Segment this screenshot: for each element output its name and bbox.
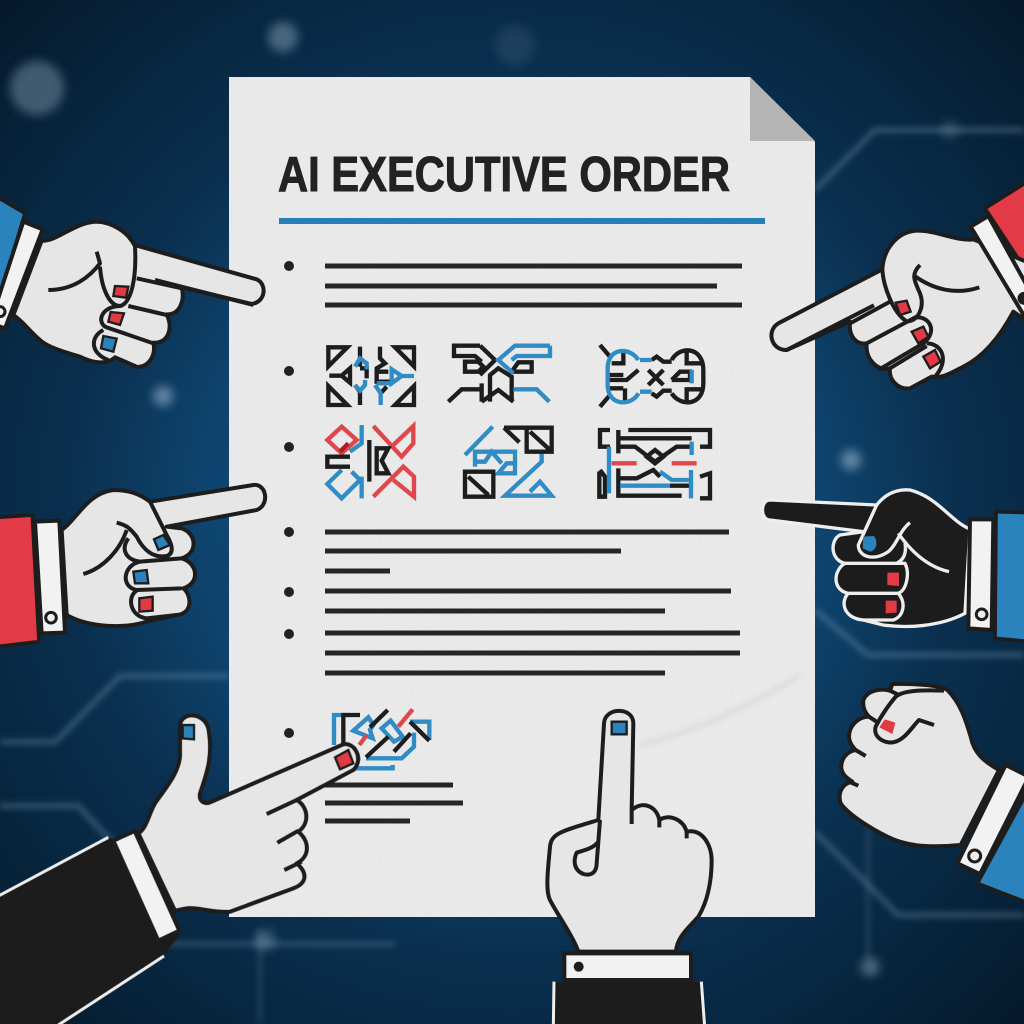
palm and fingers bbox=[13, 222, 264, 367]
icon: glyph 2 bbox=[448, 346, 550, 402]
finger details bbox=[575, 810, 687, 875]
finger details bbox=[847, 690, 944, 786]
cuff bbox=[35, 521, 65, 633]
finger details bbox=[48, 247, 253, 360]
nails bbox=[133, 535, 170, 583]
cuff button bbox=[969, 850, 981, 862]
hand: bottom left pointing at glyph, black sleeve bbox=[0, 715, 358, 1024]
palm and fingers bbox=[840, 684, 999, 846]
palm and fingers bbox=[547, 711, 712, 952]
palm and fingers bbox=[138, 715, 358, 912]
text block placeholder lines 5 bbox=[325, 785, 463, 821]
hand: bottom centre pointing up, black sleeve bbox=[547, 711, 712, 1024]
nails bbox=[896, 301, 941, 368]
sleeve bbox=[977, 788, 1024, 903]
hand: middle right black pointing left, blue sleeve bbox=[762, 490, 1024, 642]
sleeve bbox=[0, 197, 25, 297]
cuff button bbox=[0, 307, 5, 317]
icon: glyph 5 bbox=[465, 427, 552, 497]
sleeve bbox=[552, 982, 705, 1024]
cuff bbox=[957, 765, 1024, 874]
sleeve bbox=[985, 180, 1024, 277]
panel: paper document bbox=[229, 77, 815, 917]
nails bbox=[108, 286, 128, 325]
hand: middle left pointing right, red sleeve bbox=[0, 485, 265, 647]
icon: glyph 3 bbox=[600, 345, 703, 407]
palm and fingers bbox=[62, 485, 265, 626]
cuff button bbox=[574, 962, 584, 972]
finger details bbox=[845, 505, 949, 620]
hand: top left pointing right, blue sleeve bbox=[0, 197, 264, 367]
sleeve highlights bbox=[553, 982, 705, 1024]
cuff bbox=[564, 953, 691, 980]
hand: bottom right fist, blue sleeve bbox=[840, 684, 1024, 903]
title rule bbox=[279, 218, 765, 224]
icon: glyph 4 bbox=[327, 425, 414, 498]
text block placeholder lines 2 bbox=[325, 532, 729, 571]
sleeve bbox=[0, 515, 39, 647]
icon: partially covered glyph at bottom bbox=[334, 709, 429, 768]
page fold bbox=[750, 77, 815, 141]
text block placeholder lines 4 bbox=[325, 633, 740, 673]
sleeve highlights bbox=[0, 837, 164, 1024]
icon: glyph 1 bbox=[328, 347, 414, 405]
nails bbox=[863, 536, 876, 552]
text block placeholder lines 1 bbox=[325, 266, 742, 305]
finger details bbox=[83, 502, 182, 618]
sleeve bbox=[0, 838, 180, 1024]
cuff bbox=[968, 519, 993, 630]
nail bbox=[879, 719, 895, 734]
palm and fingers bbox=[771, 231, 1024, 389]
sleeve bbox=[995, 512, 1024, 642]
cuff bbox=[113, 831, 179, 941]
finger details bbox=[267, 800, 302, 870]
nail bbox=[612, 722, 627, 734]
hand: top right pointing left, red sleeve bbox=[771, 180, 1024, 389]
finger details bbox=[787, 265, 979, 377]
title: AI EXECUTIVE ORDER bbox=[278, 148, 730, 202]
nails bbox=[183, 725, 194, 739]
icon grid: six abstract glyphs bbox=[327, 345, 710, 498]
cuff button bbox=[976, 609, 987, 620]
icon: glyph 6 bbox=[599, 430, 710, 498]
cuff button bbox=[1019, 293, 1024, 303]
bullet dots bbox=[284, 261, 294, 738]
cuff button bbox=[46, 612, 56, 623]
cuff bbox=[971, 216, 1024, 320]
cuff bbox=[0, 222, 43, 328]
text block placeholder lines 3 bbox=[325, 591, 731, 611]
palm and fingers bbox=[762, 490, 970, 626]
